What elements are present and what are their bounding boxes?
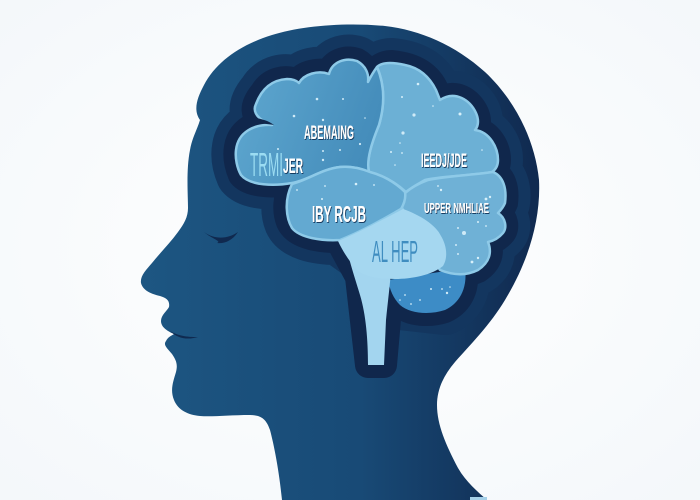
eyelid	[204, 232, 238, 243]
brain: TRMI	[250, 146, 283, 183]
frontal lobe	[236, 60, 383, 185]
brain stem	[345, 240, 391, 365]
brain	[236, 60, 505, 365]
brain: AL HEP	[372, 234, 418, 269]
head silhouette	[141, 24, 539, 500]
brain: ABEMAING	[304, 123, 354, 144]
brain dark outline	[236, 60, 506, 365]
parietal lobe	[368, 63, 498, 192]
cerebellum	[388, 268, 466, 313]
brain: IEEDJ/JDE	[421, 151, 467, 172]
label: lower left lobe: IBY RCJB	[312, 201, 366, 227]
brain halo	[236, 60, 506, 310]
temporal right lobe	[402, 172, 506, 274]
mouth line	[170, 331, 198, 339]
brain: JER	[283, 155, 303, 178]
label: temporal: UPPER NMHLIAE	[424, 200, 489, 217]
occipital lower-left lobe	[287, 167, 405, 240]
central lobe	[338, 209, 446, 279]
corner fragment	[470, 497, 487, 500]
